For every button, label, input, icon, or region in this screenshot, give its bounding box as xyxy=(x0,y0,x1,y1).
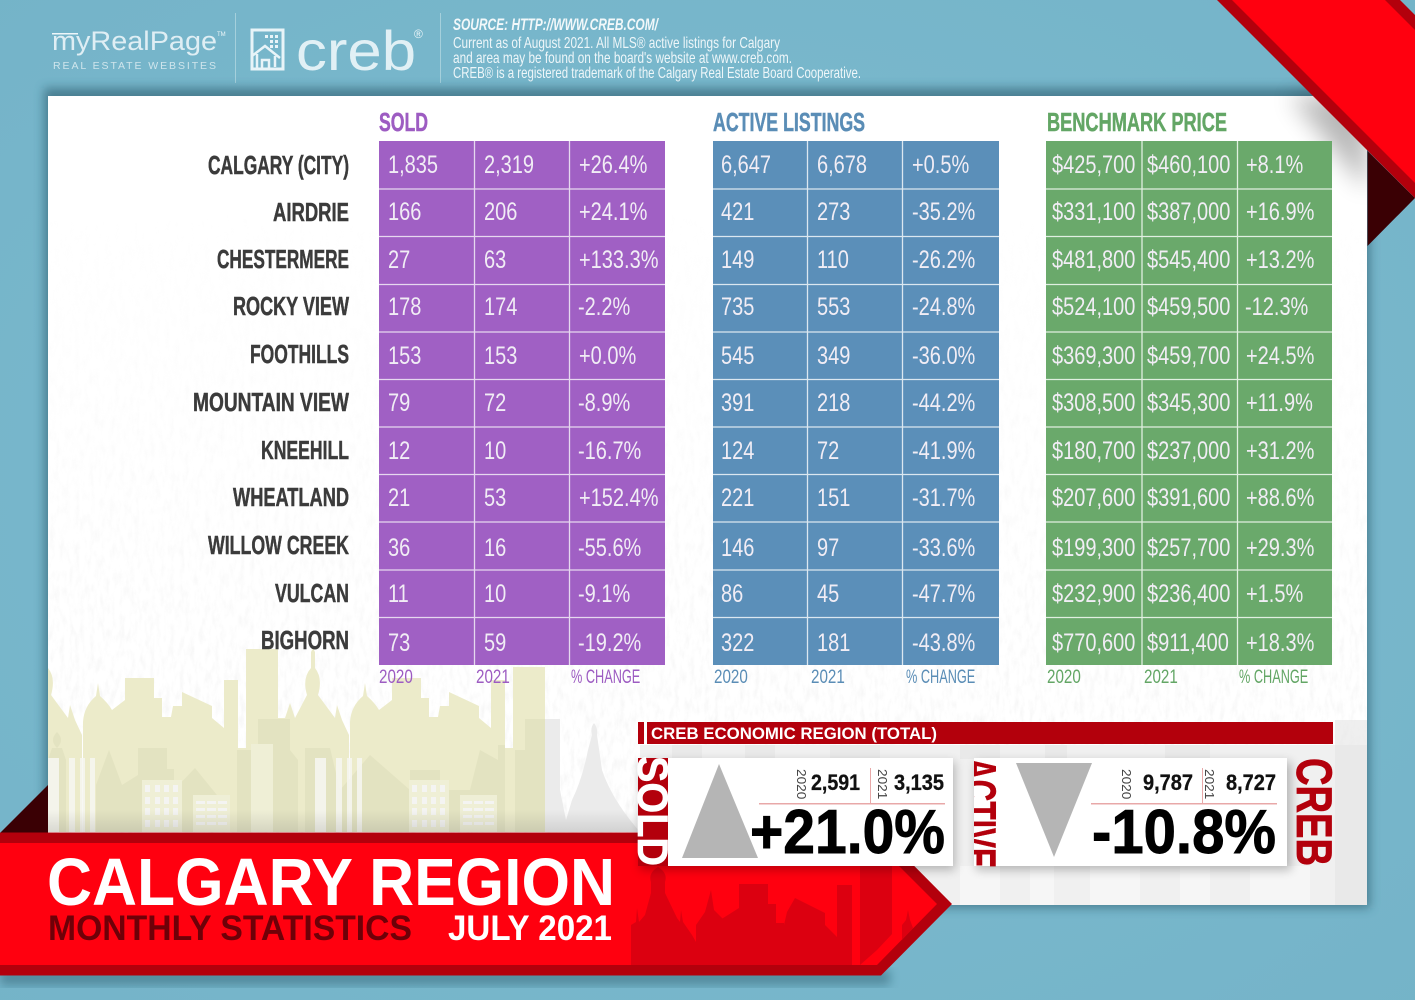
table: sold: 11 xyxy=(388,580,409,608)
table: active listings: 110 xyxy=(817,246,849,274)
table: sold: 36 xyxy=(388,534,410,562)
table: benchmark price: $257,700 xyxy=(1147,534,1230,562)
table: benchmark price xyxy=(1046,141,1332,665)
table: benchmark price: $237,000 xyxy=(1147,437,1230,465)
table: benchmark price: $545,400 xyxy=(1147,246,1230,274)
region labels xyxy=(193,150,349,655)
table: active listings: 391 xyxy=(721,389,754,417)
region labels: CALGARY (CITY) xyxy=(208,150,349,180)
column labels: active listings: % CHANGE xyxy=(906,667,975,688)
heading: benchmark price: BENCHMARK PRICE xyxy=(1047,107,1227,137)
table: active listings: 97 xyxy=(817,534,839,562)
table: active listings: -44.2% xyxy=(912,389,975,417)
table: benchmark price: $391,600 xyxy=(1147,484,1230,512)
table: benchmark price: +8.1% xyxy=(1246,151,1303,179)
table: active listings: 421 xyxy=(721,198,754,226)
logo: myRealPage xyxy=(52,26,226,72)
table: active listings: 124 xyxy=(721,437,754,465)
column labels: benchmark price: 2020 xyxy=(1047,665,1081,687)
table: sold: 206 xyxy=(484,198,517,226)
title bar: CREB economic region: CREB ECONOMIC REGION (TOTAL) xyxy=(651,724,937,743)
sold values: 3,135 xyxy=(894,770,944,795)
column labels: sold: 2021 xyxy=(476,665,510,687)
table: sold: 174 xyxy=(484,293,517,321)
table: sold: -55.6% xyxy=(578,534,641,562)
column labels: active listings xyxy=(714,665,975,688)
table: benchmark price: $524,100 xyxy=(1052,293,1135,321)
table: benchmark price: $199,300 xyxy=(1052,534,1135,562)
table: active listings: -43.8% xyxy=(912,629,975,657)
table: sold: 166 xyxy=(388,198,421,226)
banner shadow xyxy=(0,970,890,985)
table: sold: 59 xyxy=(484,629,506,657)
table: benchmark price: $770,600 xyxy=(1052,629,1135,657)
banner: red arrow xyxy=(0,832,952,976)
column labels: benchmark price: 2021 xyxy=(1144,665,1178,687)
skyline: grey silhouette xyxy=(525,719,1367,905)
heading: active listings: ACTIVE LISTINGS xyxy=(713,107,865,137)
table: sold: -19.2% xyxy=(578,629,641,657)
table: active listings: 146 xyxy=(721,534,754,562)
active values xyxy=(1091,768,1277,804)
table: benchmark price: $459,700 xyxy=(1147,342,1230,370)
table: active listings: 553 xyxy=(817,293,850,321)
banner date: July 2021: JULY 2021 xyxy=(448,909,612,948)
table: active listings: 735 xyxy=(721,293,754,321)
card: active total xyxy=(953,758,1287,868)
table: active listings: -35.2% xyxy=(912,198,975,226)
icon: down triangle xyxy=(1016,763,1092,857)
title bar: CREB economic region xyxy=(638,722,1333,744)
table: sold: 10 xyxy=(484,437,506,465)
table: sold: 153 xyxy=(388,342,421,370)
table: benchmark price: +88.6% xyxy=(1246,484,1314,512)
sold vertical label: SOLD xyxy=(628,756,676,866)
icon: up triangle xyxy=(682,764,758,858)
table: active listings: -24.8% xyxy=(912,293,975,321)
sold percent change: +21.0% xyxy=(750,798,945,867)
region labels: CHESTERMERE xyxy=(217,244,349,274)
table: sold: 16 xyxy=(484,534,506,562)
table: sold: 53 xyxy=(484,484,506,512)
skyline: cream city silhouette xyxy=(0,648,640,832)
card: sold total xyxy=(628,756,953,867)
source text block: SOURCE: HTTP://WWW.CREB.COM/ xyxy=(453,16,660,34)
table: sold: +0.0% xyxy=(579,342,636,370)
table: active listings: 273 xyxy=(817,198,850,226)
table: sold: -8.9% xyxy=(578,389,630,417)
table: sold: 73 xyxy=(388,629,410,657)
table: active listings: 349 xyxy=(817,342,850,370)
panel shadow xyxy=(44,88,1370,908)
table: benchmark price: $331,100 xyxy=(1052,198,1135,226)
table: sold xyxy=(379,141,665,665)
table: active listings: 45 xyxy=(817,580,839,608)
table: active listings: 221 xyxy=(721,484,754,512)
column labels: benchmark price xyxy=(1047,665,1308,688)
table: benchmark price: $387,000 xyxy=(1147,198,1230,226)
table: sold: 12 xyxy=(388,437,410,465)
table: benchmark price: +11.9% xyxy=(1246,389,1313,417)
region labels: MOUNTAIN VIEW xyxy=(193,387,349,417)
table: benchmark price: +13.2% xyxy=(1246,246,1314,274)
table: active listings: -33.6% xyxy=(912,534,975,562)
region labels: BIGHORN xyxy=(261,625,349,655)
region labels: FOOTHILLS xyxy=(250,339,349,369)
region labels: WILLOW CREEK xyxy=(208,530,349,560)
table: benchmark price: $207,600 xyxy=(1052,484,1135,512)
source text block: Current as of August 2021. All MLS® active listings for Calgary xyxy=(453,35,780,52)
column labels: active listings: 2020 xyxy=(714,665,748,687)
table: benchmark price: -12.3% xyxy=(1245,293,1308,321)
logo: myRealPage: TM xyxy=(217,32,226,38)
logo: creb: ® xyxy=(414,27,423,41)
source text block: and area may be found on the board's website at www.creb.com. xyxy=(453,50,792,67)
region labels: ROCKY VIEW xyxy=(233,291,349,321)
table: active listings: 86 xyxy=(721,580,743,608)
table: active listings: 181 xyxy=(817,629,850,657)
table: active listings: -36.0% xyxy=(912,342,975,370)
table: active listings: 322 xyxy=(721,629,754,657)
source text block: CREB® is a registered trademark of the Calgary Real Estate Board Cooperative. xyxy=(453,65,861,82)
table: active listings: 545 xyxy=(721,342,754,370)
logo: creb xyxy=(252,19,423,82)
sold values: 2021 xyxy=(875,769,890,799)
active values: 2020 xyxy=(1119,769,1134,799)
table: benchmark price: $425,700 xyxy=(1052,151,1135,179)
active values: 9,787 xyxy=(1143,770,1193,795)
column labels: active listings: 2021 xyxy=(811,665,845,687)
ribbon fold: top right xyxy=(1368,151,1415,246)
region labels: WHEATLAND xyxy=(233,482,349,512)
logo: myRealPage: REAL ESTATE WEBSITES xyxy=(53,60,216,72)
table: active listings: -31.7% xyxy=(912,484,975,512)
heading: sold: SOLD xyxy=(379,107,428,137)
table: sold: -16.7% xyxy=(578,437,641,465)
ribbon: top right corner xyxy=(1217,0,1415,198)
table: benchmark price: $369,300 xyxy=(1052,342,1135,370)
active values: 8,727 xyxy=(1226,770,1276,795)
active vertical label: ACTIVE xyxy=(953,758,1006,868)
banner fold: left xyxy=(0,785,48,833)
table: sold: 2,319 xyxy=(484,151,534,179)
table: active listings: 218 xyxy=(817,389,850,417)
card shadows xyxy=(640,762,1291,870)
table: sold: 63 xyxy=(484,246,506,274)
table: benchmark price: +18.3% xyxy=(1246,629,1314,657)
table: sold: +26.4% xyxy=(579,151,647,179)
logo: myRealPage: myRealPage xyxy=(52,26,217,56)
active percent change: -10.8% xyxy=(1092,798,1276,867)
table: sold: 21 xyxy=(388,484,410,512)
logo: creb: creb xyxy=(296,19,416,82)
sold values: 2,591 xyxy=(811,770,860,795)
table: active listings: -47.7% xyxy=(912,580,975,608)
table: sold: 27 xyxy=(388,246,410,274)
panel: white paper xyxy=(48,96,1367,905)
table: benchmark price: +24.5% xyxy=(1246,342,1314,370)
table: sold: 1,835 xyxy=(388,151,438,179)
column labels: sold: 2020 xyxy=(379,665,413,687)
source text block xyxy=(453,16,861,82)
table: sold: +133.3% xyxy=(579,246,658,274)
table: benchmark price: $236,400 xyxy=(1147,580,1230,608)
table: sold: +24.1% xyxy=(579,198,647,226)
banner subtitle: Monthly Statistics: MONTHLY STATISTICS xyxy=(48,909,412,948)
table: sold: 178 xyxy=(388,293,421,321)
column labels: sold xyxy=(379,665,640,688)
sold values: 2020 xyxy=(794,769,809,799)
region labels: KNEEHILL xyxy=(261,435,349,465)
ribbon shadow on panel xyxy=(1290,96,1367,190)
table: benchmark price: $308,500 xyxy=(1052,389,1135,417)
table: sold: 10 xyxy=(484,580,506,608)
table: active listings: -41.9% xyxy=(912,437,975,465)
sold values xyxy=(759,768,945,804)
CREB vertical label: CREB xyxy=(1286,758,1342,866)
table: benchmark price: $911,400 xyxy=(1147,629,1229,657)
table: sold: -9.1% xyxy=(578,580,630,608)
table: active listings: -26.2% xyxy=(912,246,975,274)
table: benchmark price: $345,300 xyxy=(1147,389,1230,417)
table: benchmark price: +29.3% xyxy=(1246,534,1314,562)
column labels: benchmark price: % CHANGE xyxy=(1239,667,1308,688)
table: active listings xyxy=(713,141,999,665)
table: benchmark price: $481,800 xyxy=(1052,246,1135,274)
table: active listings: 72 xyxy=(817,437,839,465)
table: benchmark price: $232,900 xyxy=(1052,580,1135,608)
table: active listings: 6,647 xyxy=(721,151,771,179)
region labels: VULCAN xyxy=(275,578,349,608)
table: sold: -2.2% xyxy=(578,293,630,321)
table: sold: 153 xyxy=(484,342,517,370)
table: benchmark price: $460,100 xyxy=(1147,151,1230,179)
table: sold: +152.4% xyxy=(579,484,658,512)
active values: 2021 xyxy=(1202,769,1217,799)
table: benchmark price: +31.2% xyxy=(1246,437,1314,465)
table: benchmark price: $459,500 xyxy=(1147,293,1230,321)
table: sold: 79 xyxy=(388,389,410,417)
table: benchmark price: +1.5% xyxy=(1246,580,1303,608)
table: active listings: 149 xyxy=(721,246,754,274)
table: benchmark price: $180,700 xyxy=(1052,437,1135,465)
table: active listings: 151 xyxy=(817,484,850,512)
column labels: sold: % CHANGE xyxy=(571,667,640,688)
banner title: Calgary Region: CALGARY REGION xyxy=(47,845,615,920)
table: active listings: 6,678 xyxy=(817,151,867,179)
table: sold: 72 xyxy=(484,389,506,417)
region labels: AIRDRIE xyxy=(273,197,349,227)
table: benchmark price: +16.9% xyxy=(1246,198,1314,226)
table: active listings: +0.5% xyxy=(912,151,969,179)
